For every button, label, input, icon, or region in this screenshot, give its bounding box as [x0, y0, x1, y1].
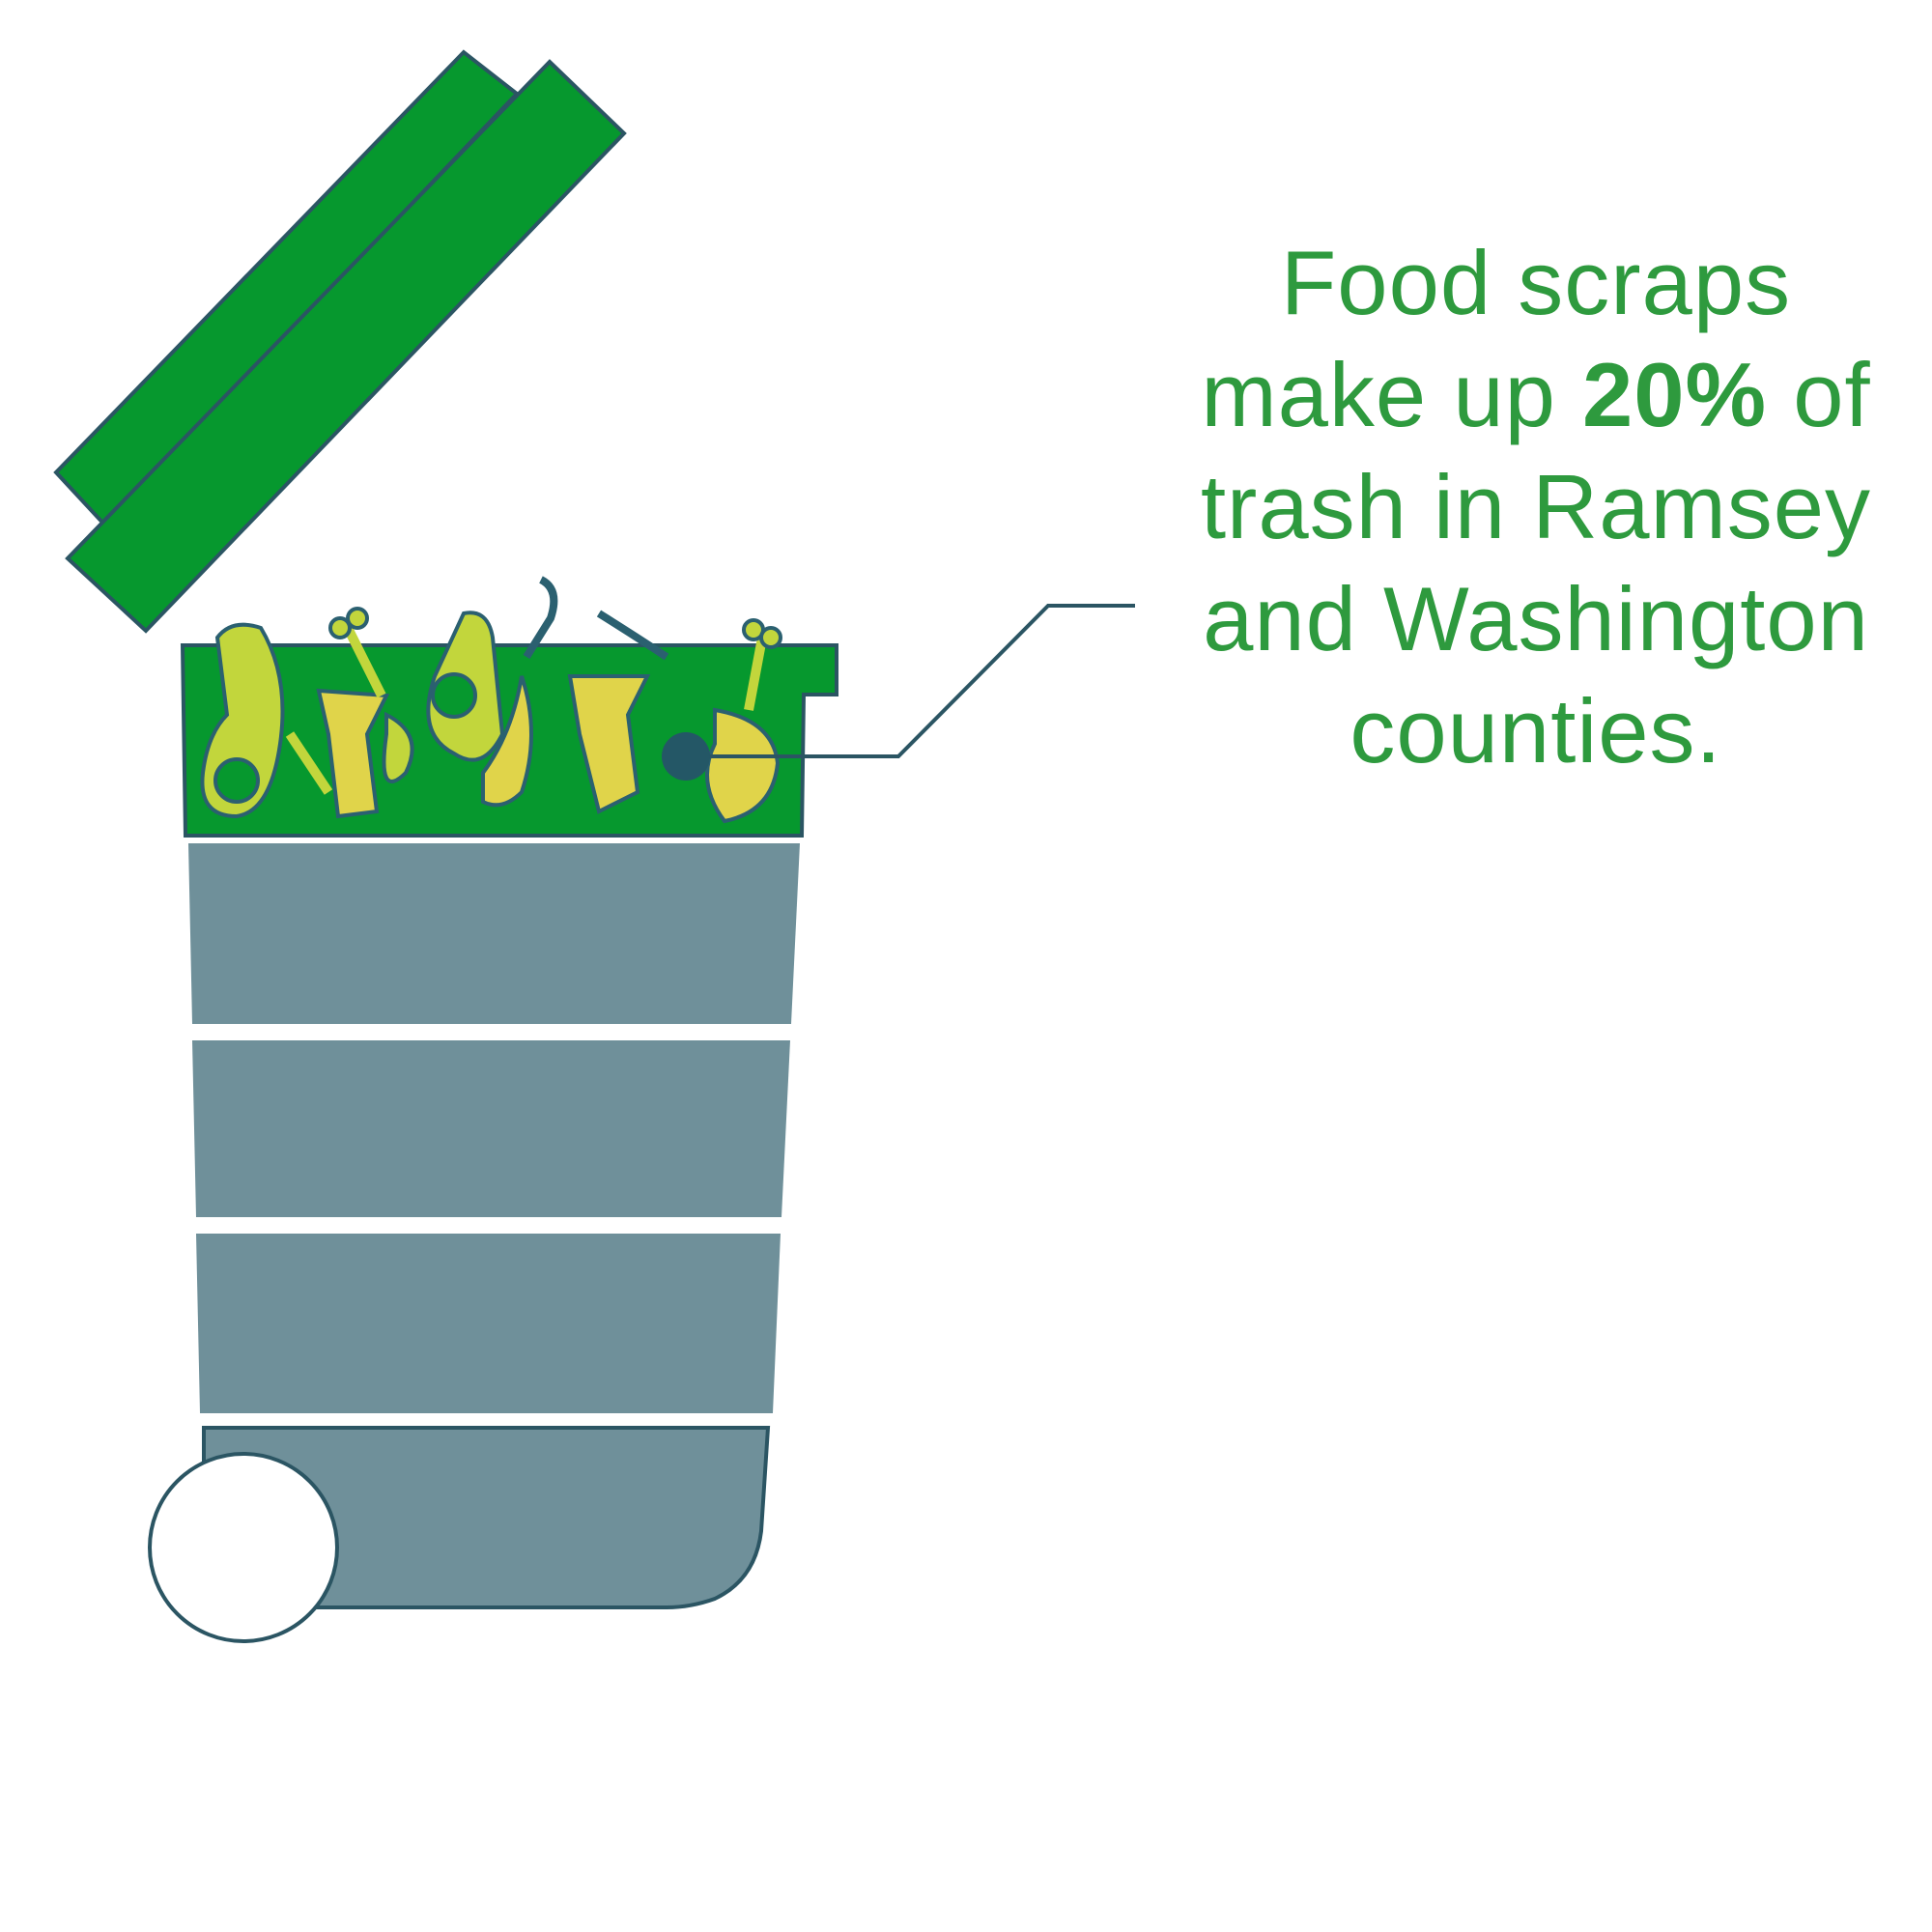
- callout text: trash in Ramsey: [1201, 456, 1871, 557]
- food scraps: [202, 580, 781, 821]
- callout text: Food scraps: [1281, 232, 1791, 333]
- callout text: and Washington: [1203, 568, 1869, 669]
- callout line: [662, 606, 1135, 781]
- callout text: make up 20% of: [1201, 344, 1871, 445]
- lid: [56, 52, 624, 631]
- bin top green section: [183, 645, 837, 836]
- wheel: [150, 1454, 337, 1641]
- callout text: counties.: [1350, 680, 1722, 781]
- bin body bands: [188, 843, 800, 1607]
- callout text: [1201, 232, 1871, 781]
